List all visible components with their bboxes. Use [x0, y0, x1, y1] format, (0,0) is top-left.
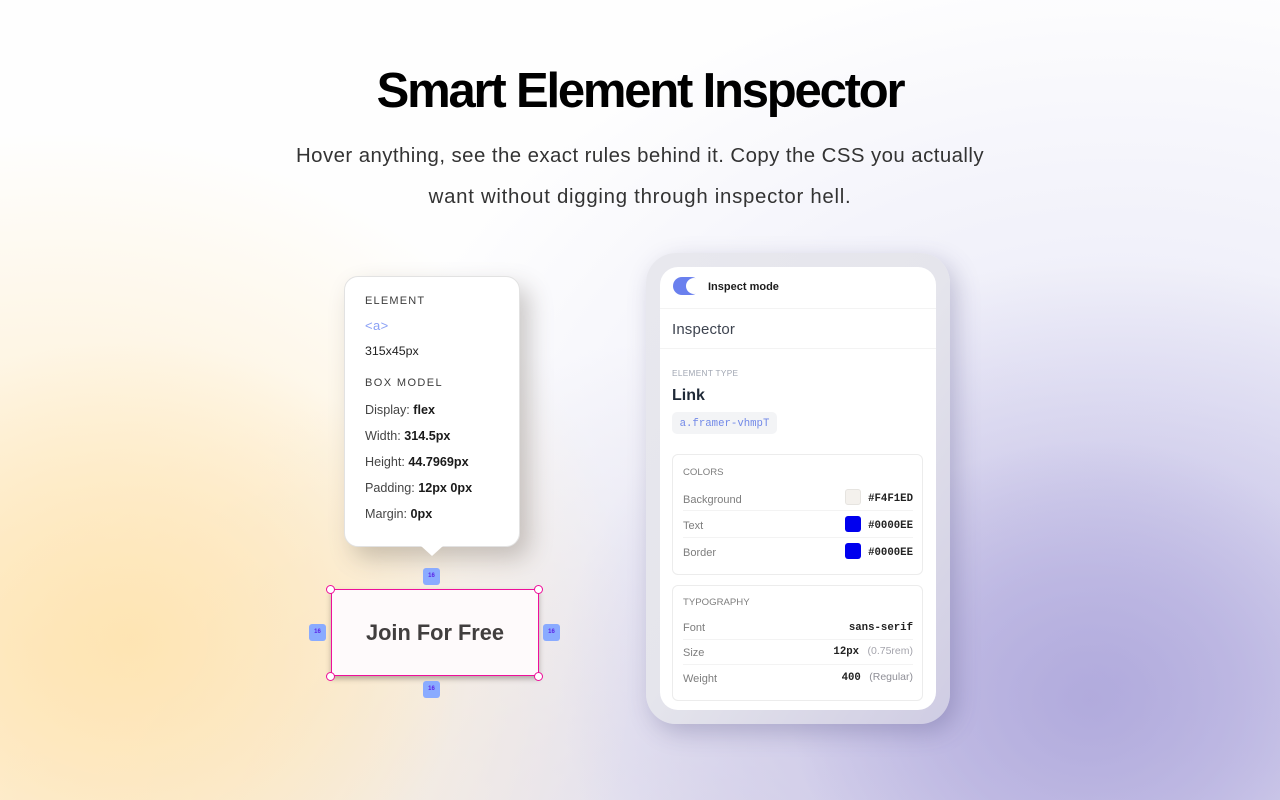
- inspect mode label: Inspect mode: [708, 281, 779, 293]
- corner handle top right: [534, 585, 543, 594]
- panel: colors: [672, 454, 923, 575]
- tooltip pointer: [421, 546, 443, 556]
- font value: sans-serif: [849, 622, 913, 634]
- subtitle: want without digging through inspector hell.: [429, 186, 851, 208]
- tooltip card: [344, 276, 520, 547]
- toggle knob: [686, 278, 702, 294]
- class chip: a.framer-vhmpT: [680, 418, 769, 430]
- text hex: #0000EE: [868, 520, 913, 532]
- display row: Display: flex: [365, 403, 435, 417]
- spacing badge right: [543, 624, 560, 641]
- colors heading: COLORS: [683, 467, 724, 478]
- element type label: ELEMENT TYPE: [672, 369, 738, 378]
- spacing badge left: [309, 624, 326, 641]
- panel: inspector device: [646, 253, 950, 724]
- spacing badge top: [423, 568, 440, 585]
- spacing badge top: 16: [428, 573, 435, 579]
- box model label: BOX MODEL: [365, 377, 443, 389]
- padding row: Padding: 12px 0px: [365, 481, 472, 495]
- subtitle: [296, 145, 984, 208]
- margin row: Margin: 0px: [365, 507, 432, 521]
- font row: Font: [683, 622, 705, 634]
- background swatch: [845, 489, 861, 505]
- toggle: [673, 277, 700, 295]
- element label: ELEMENT: [365, 295, 425, 307]
- element tag: <a>: [365, 318, 389, 333]
- weight row: Weight: [683, 673, 717, 685]
- width row: Width: 314.5px: [365, 429, 450, 443]
- element type value: Link: [672, 387, 705, 404]
- inspector heading: Inspector: [672, 321, 735, 338]
- spacing badge bottom: 16: [428, 686, 435, 692]
- subtitle: Hover anything, see the exact rules behind it. Copy the CSS you actually: [296, 145, 984, 167]
- class chip: [672, 412, 777, 434]
- spacing badge bottom: [423, 681, 440, 698]
- corner handle bottom right: [534, 672, 543, 681]
- button: Join For Free: [366, 620, 504, 645]
- element size: 315x45px: [365, 344, 419, 358]
- typography heading: TYPOGRAPHY: [683, 597, 750, 608]
- inspector screen: [660, 267, 936, 710]
- corner handle top left: [326, 585, 335, 594]
- button: [331, 589, 539, 676]
- border swatch: [845, 543, 861, 559]
- selected button with spacing badges: [309, 568, 560, 698]
- background row: Background: [683, 494, 742, 506]
- title: Smart Element Inspector: [377, 64, 903, 118]
- text swatch: [845, 516, 861, 532]
- border row: Border: [683, 547, 716, 559]
- spacing badge right: 16: [548, 629, 555, 635]
- size value: 12px (0.75rem): [833, 645, 913, 658]
- weight value: 400 (Regular): [842, 671, 913, 684]
- corner handle bottom left: [326, 672, 335, 681]
- spacing badge left: 16: [314, 629, 321, 635]
- panel: typography: [672, 585, 923, 701]
- text row: Text: [683, 520, 703, 532]
- border hex: #0000EE: [868, 547, 913, 559]
- background hex: #F4F1ED: [868, 493, 913, 505]
- panel: element tooltip: [341, 275, 541, 570]
- size row: Size: [683, 647, 704, 659]
- height row: Height: 44.7969px: [365, 455, 469, 469]
